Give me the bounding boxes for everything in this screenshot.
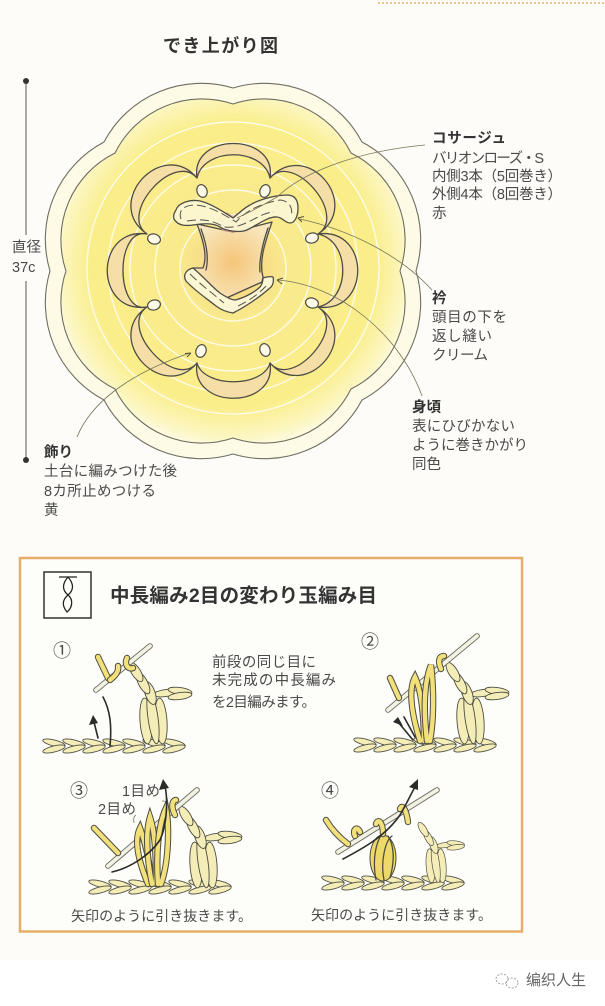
step 2 drawing [353, 636, 509, 754]
title: でき上がり図 [163, 35, 278, 56]
step 1 drawing [42, 646, 192, 755]
label: bodice: 表にひびかない [412, 418, 515, 435]
label: decoration [44, 443, 178, 519]
step 4 number: ④ [321, 781, 339, 801]
decorative ribbon petals [107, 144, 358, 398]
upper collar [174, 195, 298, 231]
step 2 number: ② [361, 632, 379, 652]
watermark: 编织人生 [526, 972, 586, 989]
watermark [496, 972, 586, 989]
diameter scale: 37c [12, 260, 35, 276]
diameter scale: 直径 [12, 239, 41, 256]
step 3 drawing [88, 779, 242, 896]
step 1 number: ① [53, 641, 71, 661]
label: collar: 衿 [432, 289, 447, 307]
label: corsage: バリオンローズ・S [432, 150, 544, 167]
flower cosy base [45, 83, 421, 459]
label: bodice: ように巻きかがり [412, 437, 528, 454]
diameter scale [12, 78, 41, 463]
step 1 text: 前段の同じ目に [212, 654, 316, 671]
label: collar: 頭目の下を [432, 309, 507, 326]
step 4 drawing [321, 779, 465, 892]
label: corsage: 内側3本（5回巻き） [432, 168, 562, 185]
panel: technique [20, 558, 522, 932]
icon: stitch symbol [44, 572, 91, 618]
step 1 text: 未完成の中長編み [212, 672, 336, 689]
lower collar [185, 268, 273, 313]
step 4 caption: 矢印のように引き抜きます。 [311, 907, 492, 923]
leader lines [77, 145, 432, 437]
icon: watermark chat bubbles [496, 974, 518, 988]
label: decoration: 飾り [44, 443, 73, 461]
label: collar [432, 289, 507, 364]
step 3 stitch labels: 2目め [98, 801, 136, 818]
step 1 text [212, 654, 336, 711]
step 3 number: ③ [70, 781, 88, 801]
label: collar: 返し縫い [432, 328, 492, 345]
label: corsage: コサージュ [432, 130, 506, 147]
label: bodice: 身頃 [412, 398, 441, 416]
label: decoration: 8カ所止めつける [44, 483, 156, 500]
step 1 text: を2目編みます。 [212, 694, 316, 711]
label: corsage: 外側4本（8回巻き） [432, 186, 562, 203]
step 3 caption: 矢印のように引き抜きます。 [71, 908, 252, 924]
label: decoration: 黄 [44, 502, 58, 519]
label: bodice: 同色 [412, 456, 441, 473]
label: corsage: 赤 [432, 205, 447, 222]
label: decoration: 土台に編みつけた後 [44, 463, 178, 480]
label: bodice [412, 398, 528, 473]
heading: technique title: 中長編み2目の変わり玉編み目 [110, 585, 377, 607]
flower anchor knots [146, 183, 320, 359]
corsage [219, 213, 247, 232]
step 3 stitch labels [98, 783, 167, 823]
label: corsage [432, 130, 562, 222]
body of the cosy [174, 195, 298, 313]
step 3 stitch labels: 1目め [122, 783, 160, 800]
label: collar: クリーム [432, 347, 488, 364]
